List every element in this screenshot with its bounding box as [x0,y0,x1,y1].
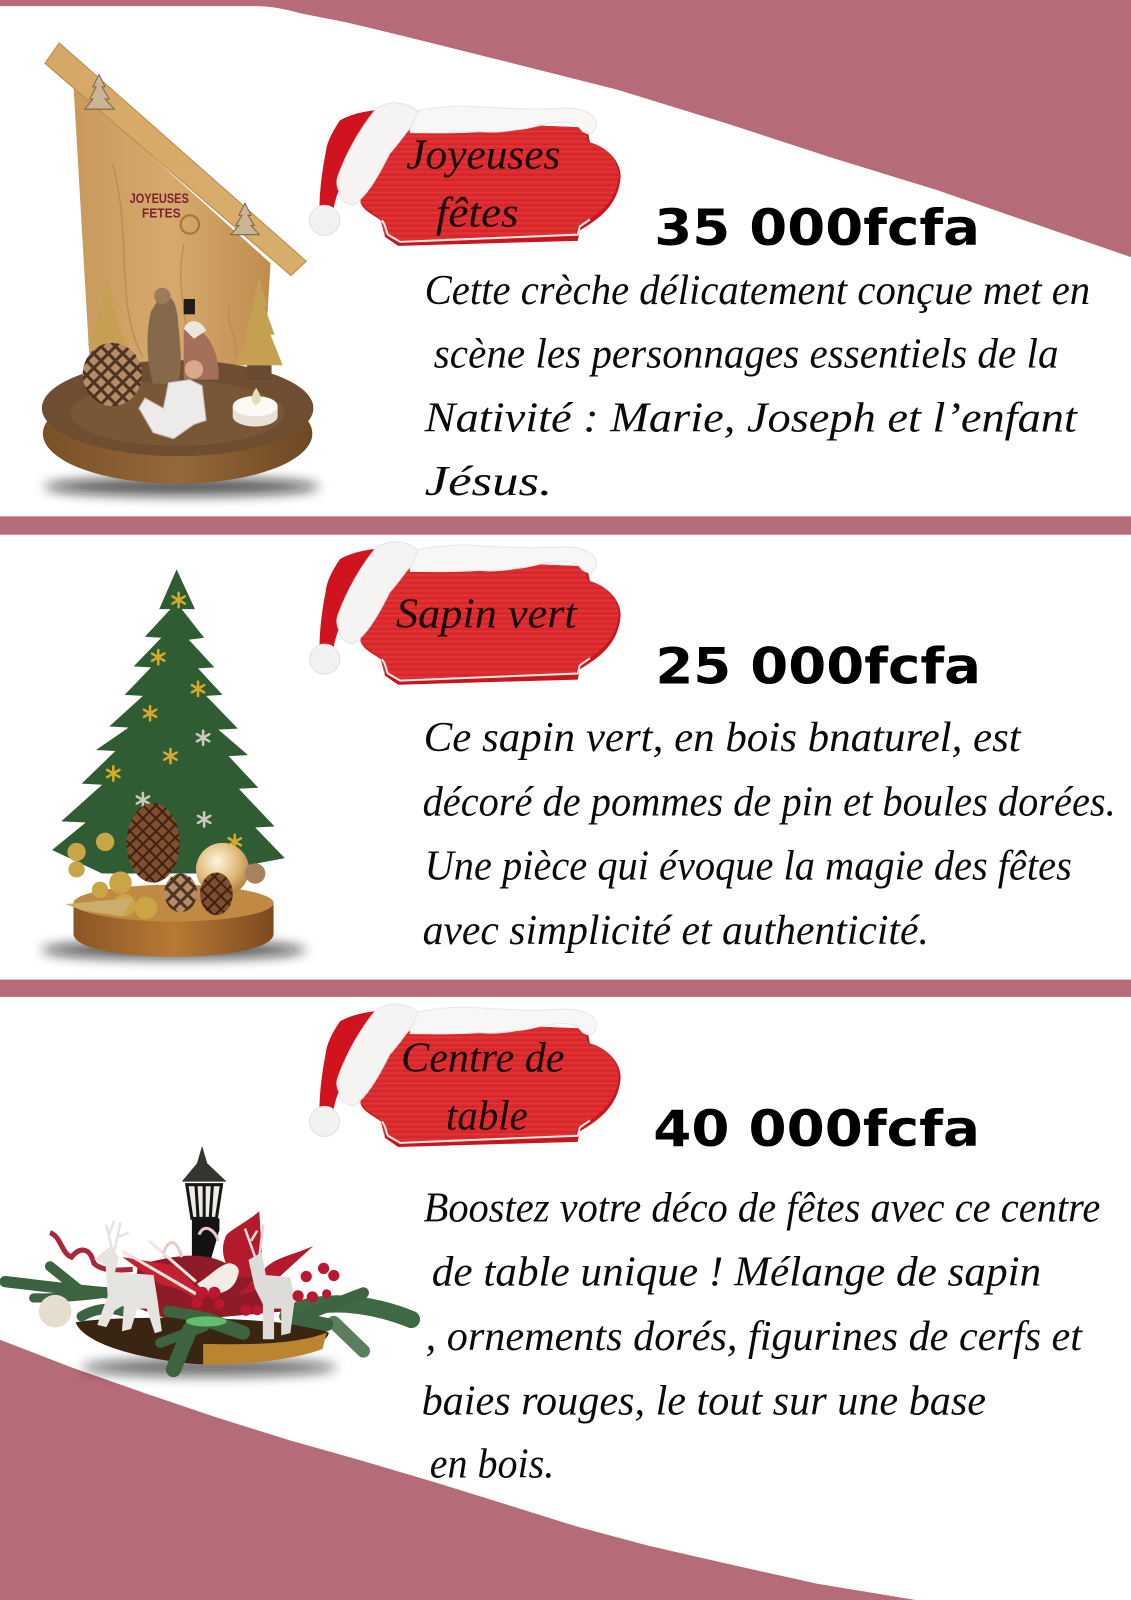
sign 1: Joyeuses fêtes [310,103,621,246]
icon: golden bauble [196,843,249,896]
icon: white deer right [245,1224,294,1339]
sign: glitter joyeuses fetes [130,191,189,220]
description 2: Une pièce qui évoque la magie des fêtes [425,844,1072,890]
icon: white deer left [95,1220,161,1333]
icon: angel [139,380,206,439]
description 2: avec simplicité et authenticité. [423,908,929,954]
band 2 [0,980,1131,997]
icon: large pine cone [127,803,180,883]
sign 1: Joyeuses fêtes: fêtes [436,191,519,237]
sign 2: Sapin vert: Sapin vert [396,592,578,638]
icon: tea light [233,388,278,427]
sign 1: Joyeuses fêtes: Joyeuses [406,132,560,178]
icon: lantern [182,1146,227,1265]
sign 3: Centre de table [310,1004,621,1147]
product: table centrepiece [5,1146,411,1377]
icon: red berries [191,1263,339,1316]
price 1: 35 000fcfa [654,199,980,257]
description 1: Jésus. [425,459,552,505]
icon: pine cone [83,343,142,406]
icon: gold glitter balls [65,833,157,919]
product: green christmas tree [41,569,306,959]
description 3: en bois. [430,1442,554,1488]
sign 3: Centre de table: table [446,1094,528,1140]
description 1 [424,268,1090,505]
price 3: 40 000fcfa [653,1100,980,1158]
wooden base [42,360,313,484]
description 2: décoré de pommes de pin et boules dorées. [423,779,1116,825]
price 2: 25 000fcfa [655,638,981,696]
sign: glitter joyeuses fetes: FETES [142,205,181,220]
icon: small green ornament [186,1316,227,1327]
icon: gold trees [88,279,283,365]
green tree [52,569,285,873]
band 1 [0,516,1131,535]
icon: ribbon and red leaves [50,1211,313,1321]
sign 3: Centre de table: Centre de [401,1035,564,1081]
sign 2: Sapin vert [310,542,621,685]
log base [76,1318,329,1364]
description 3: Boostez votre déco de fêtes avec ce centre [424,1185,1100,1231]
icon: small pine cones [164,872,233,915]
icon: white bauble [39,1295,71,1328]
description 1: Nativité : Marie, Joseph et l’enfant [424,396,1078,442]
description 3: , ornements dorés, figurines de cerfs et [426,1314,1083,1360]
icon: holy family figures [147,288,219,384]
bottom rose curve [0,1340,916,1600]
icon: wooden tree ornaments [85,74,259,235]
description 1: scène les personnages essentiels de la [434,331,1059,377]
description 3 [422,1185,1100,1488]
icon: pine branches [5,1266,411,1369]
icon: white dove [197,1263,239,1294]
log base [73,888,274,957]
description 2: Ce sapin vert, en bois bnaturel, est [424,715,1022,761]
product: nativity scene [42,43,319,496]
description 3: baies rouges, le tout sur une base [422,1378,986,1424]
sign: glitter joyeuses fetes: JOYEUSES [130,191,189,207]
description 3: de table unique ! Mélange de sapin [432,1250,1041,1296]
top rose curve [0,0,1131,257]
icon: snowflake ornaments [107,593,241,849]
description 2 [423,715,1116,954]
description 1: Cette crèche délicatement conçue met en [425,268,1090,314]
